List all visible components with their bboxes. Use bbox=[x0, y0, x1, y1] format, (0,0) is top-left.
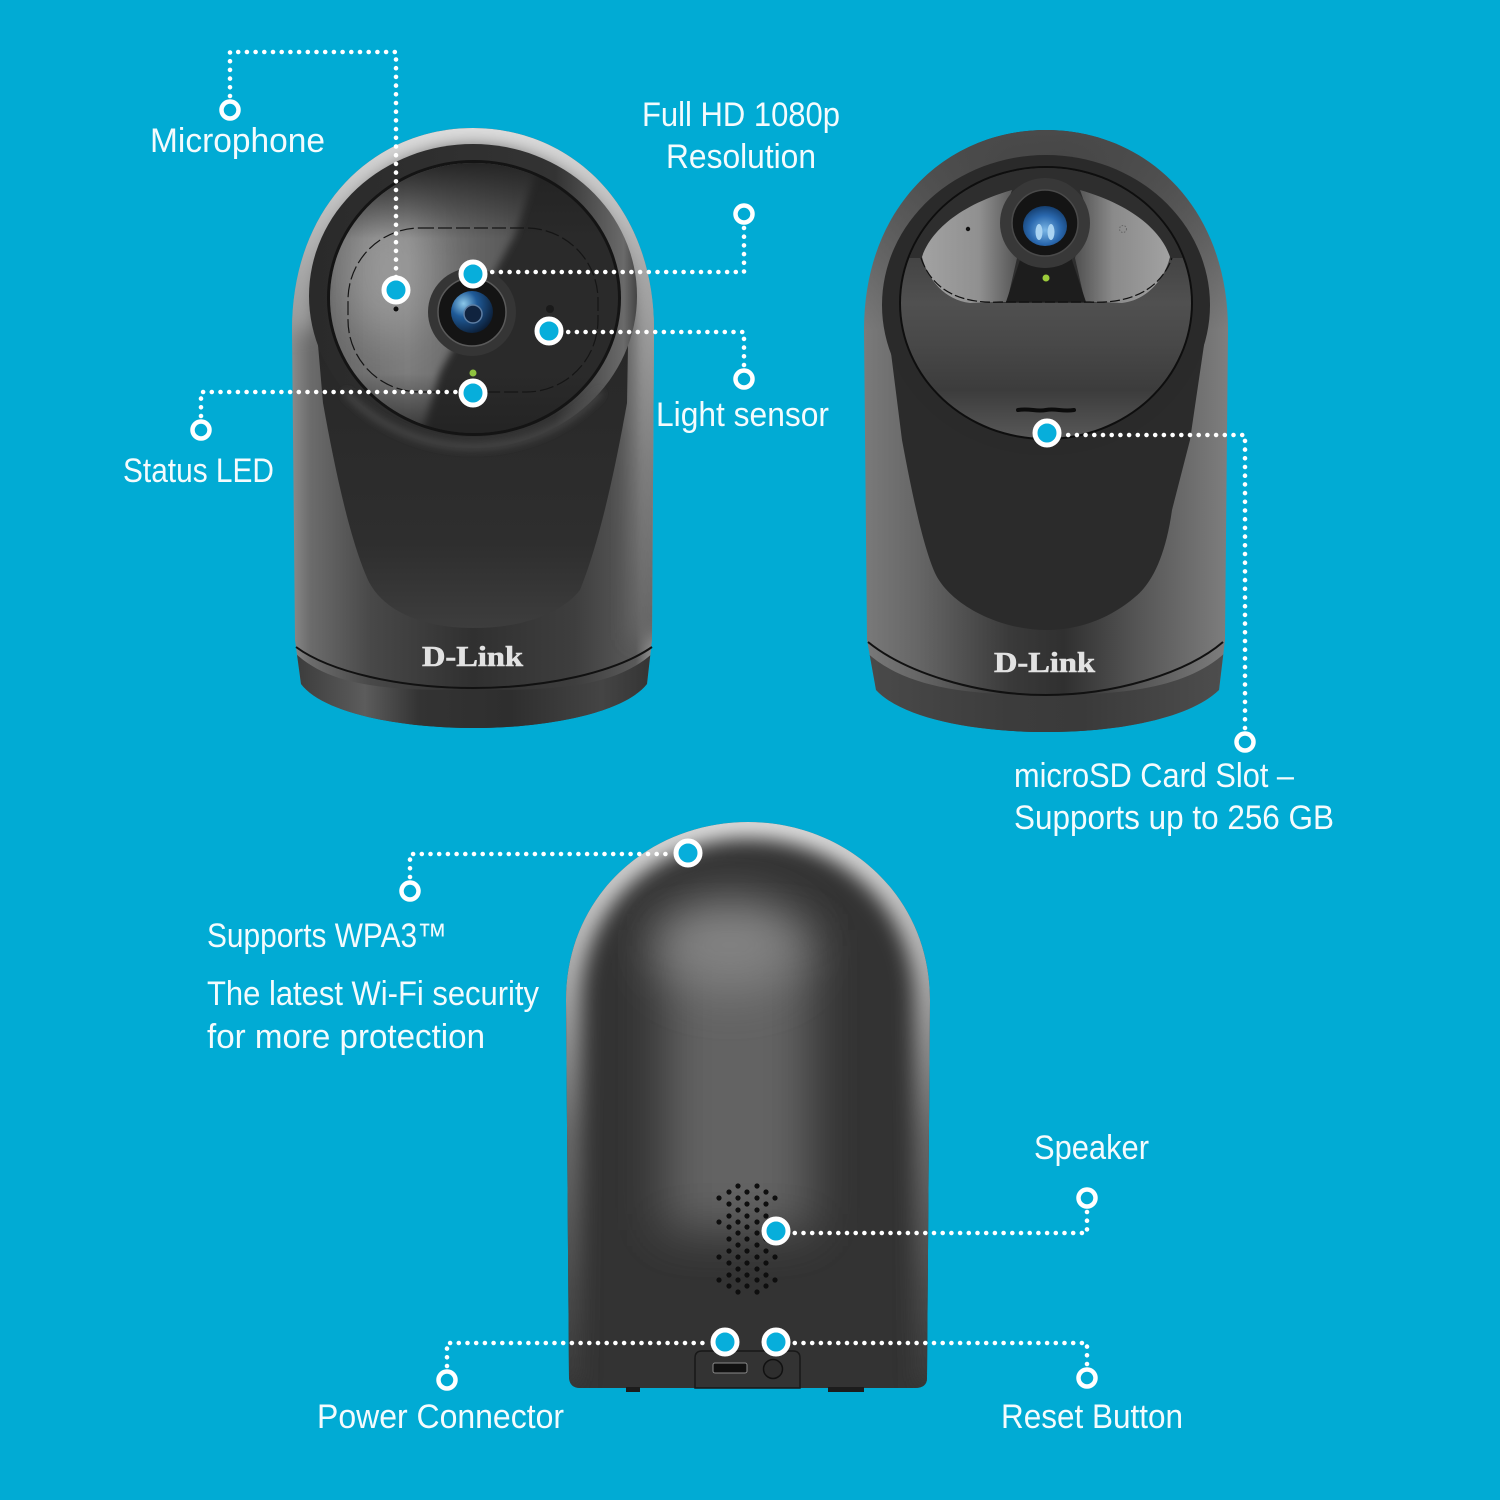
callout: WPA3 bbox=[207, 841, 700, 1056]
icon: lens bbox=[1000, 178, 1090, 268]
callout: microSD card slot: microSD Card Slot – bbox=[1014, 757, 1294, 795]
callout: WPA3: The latest Wi-Fi security bbox=[207, 975, 539, 1013]
callout: speaker: Speaker bbox=[1034, 1129, 1149, 1167]
callout: microphone: Microphone bbox=[150, 122, 325, 160]
icon: speaker grille bbox=[719, 1186, 775, 1292]
camera: rear view bbox=[566, 822, 930, 1392]
callout: WPA3: Supports WPA3™ bbox=[207, 917, 447, 955]
port panel bbox=[695, 1351, 800, 1388]
callout: status LED: Status LED bbox=[123, 452, 274, 490]
logo: D-Link front: D-Link bbox=[422, 642, 523, 673]
callout: WPA3: for more protection bbox=[207, 1018, 485, 1056]
callout: microSD card slot: Supports up to 256 GB bbox=[1014, 799, 1334, 837]
icon: card slot bbox=[1018, 409, 1074, 411]
logo: D-Link angled: D-Link bbox=[994, 648, 1095, 679]
callout: microphone bbox=[150, 52, 408, 302]
callout: full HD resolution: Resolution bbox=[666, 138, 816, 176]
callout: status LED bbox=[123, 381, 485, 490]
callout: light sensor: Light sensor bbox=[656, 396, 829, 434]
callout: power connector bbox=[317, 1330, 737, 1436]
callout: speaker bbox=[764, 1129, 1149, 1243]
icon: lens bbox=[428, 268, 516, 356]
callout: full HD resolution: Full HD 1080p bbox=[642, 96, 840, 134]
callout: reset button: Reset Button bbox=[1001, 1398, 1183, 1436]
callout: microSD card slot bbox=[1014, 421, 1334, 837]
callout: full HD resolution bbox=[461, 96, 840, 286]
callout: reset button bbox=[764, 1330, 1183, 1436]
callout: power connector: Power Connector bbox=[317, 1398, 564, 1436]
callout: light sensor bbox=[537, 319, 829, 434]
camera: front view bbox=[292, 128, 656, 730]
camera: angled view bbox=[864, 130, 1228, 735]
